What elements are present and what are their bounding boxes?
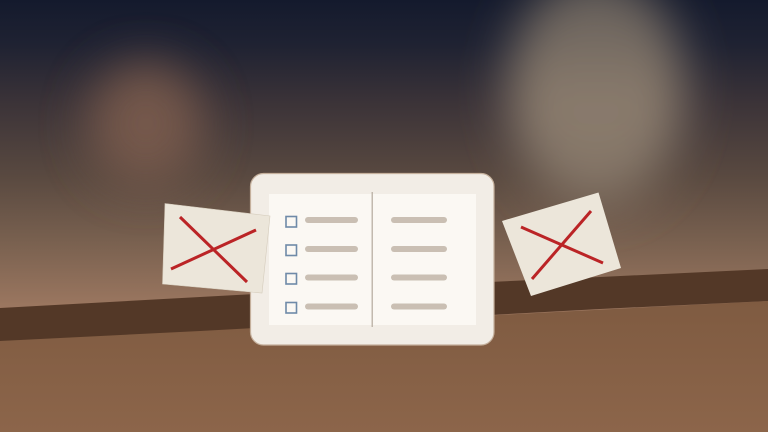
red cross right (521, 211, 603, 279)
rejected note left (162, 204, 270, 293)
checklist row 1 (286, 216, 358, 227)
red cross left (171, 217, 256, 282)
checklist row 3 (286, 274, 358, 284)
right page: text lines (372, 194, 476, 325)
checklist row 2 (286, 245, 358, 256)
background: dusk gradient wall (0, 0, 768, 320)
tablet body (250, 174, 494, 345)
left page: checklist (269, 194, 372, 325)
page divider (372, 192, 373, 327)
tablet (250, 174, 494, 345)
dark horizon band (0, 269, 768, 341)
checklist row 4 (286, 302, 358, 313)
background: blurred pale light right (508, 0, 684, 206)
rejected note right (502, 192, 621, 296)
background: blurred warm light left (88, 62, 204, 186)
ground (0, 301, 768, 432)
